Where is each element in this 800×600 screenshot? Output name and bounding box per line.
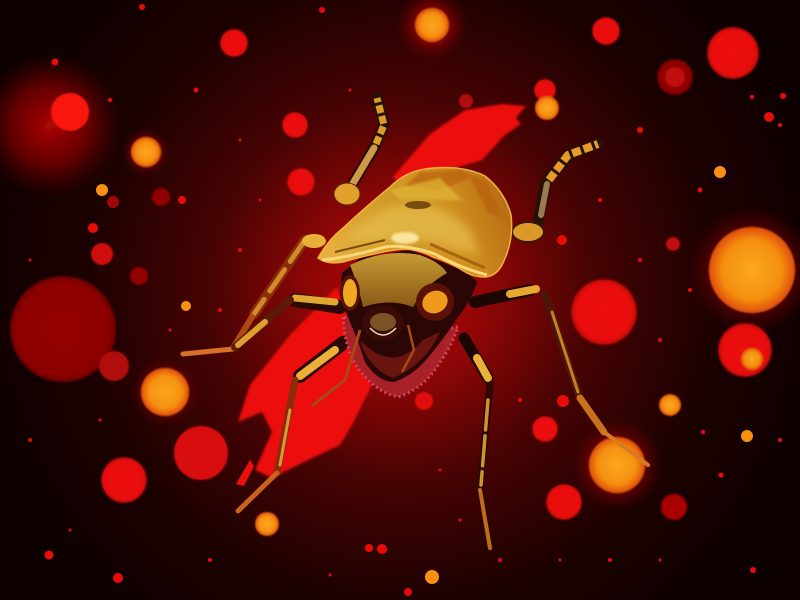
orange particles — [96, 166, 753, 584]
legs — [183, 98, 648, 548]
left upper leg — [183, 234, 326, 354]
upper-right antenna — [512, 144, 598, 242]
left lower leg — [238, 343, 343, 511]
red brush stroke — [236, 104, 526, 486]
upper-left antenna — [334, 98, 384, 205]
fringe beneath head — [343, 317, 458, 397]
right upper leg — [475, 289, 648, 465]
shell — [318, 168, 512, 277]
left middle leg — [235, 298, 340, 347]
right lower leg — [464, 338, 490, 548]
beetle — [183, 98, 648, 548]
head — [312, 250, 477, 406]
